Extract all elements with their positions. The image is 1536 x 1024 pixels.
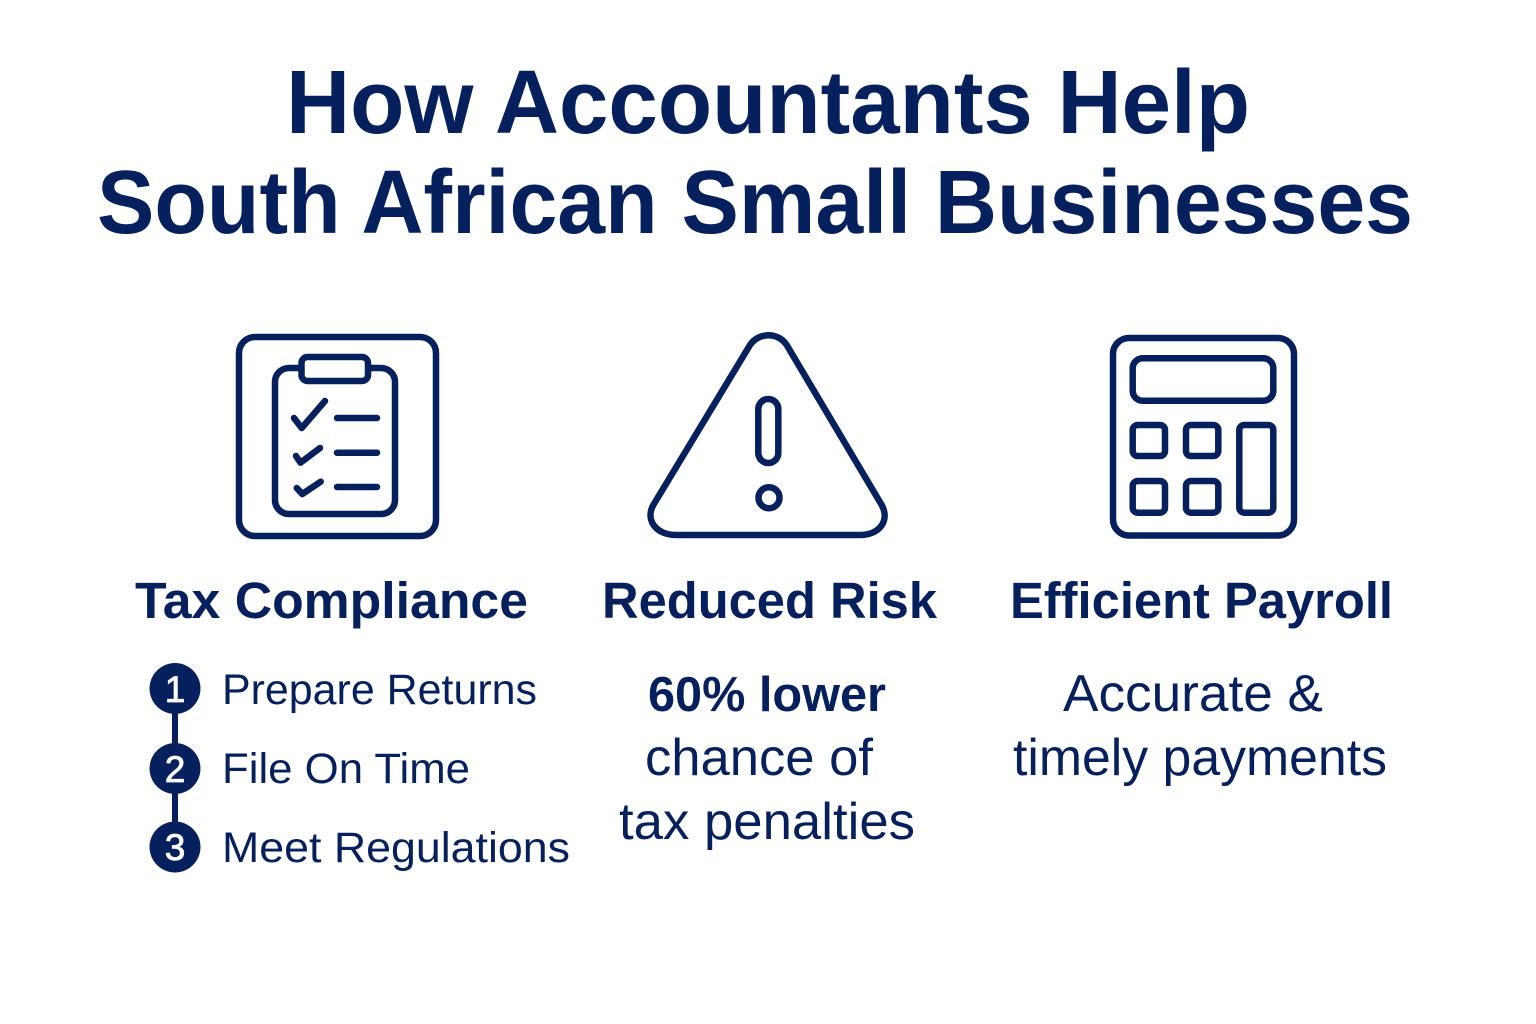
step 1: Prepare Returns — [222, 666, 537, 714]
panel: efficient payroll — [1010, 338, 1393, 787]
heading: reduced risk: Reduced Risk — [602, 572, 938, 629]
description text — [1013, 665, 1387, 787]
title: How Accountants Help — [286, 53, 1250, 153]
panel: reduced risk — [602, 335, 938, 851]
heading: efficient payroll: Efficient Payroll — [1010, 572, 1393, 629]
step 1: 1 — [165, 669, 185, 710]
icon: calculator — [1113, 338, 1294, 536]
statistic text: 60% lower — [648, 668, 886, 722]
description text: timely payments — [1013, 729, 1387, 787]
description text: Accurate & — [1063, 665, 1323, 723]
step 2: File On Time — [222, 745, 470, 793]
statistic text: tax penalties — [619, 793, 915, 851]
statistic text: chance of — [645, 729, 874, 787]
title: South African Small Businesses — [97, 153, 1413, 253]
icon: clipboard checklist — [239, 337, 436, 536]
title — [97, 53, 1413, 253]
statistic text — [619, 668, 915, 851]
panel: tax compliance — [135, 337, 570, 872]
step 2: 2 — [165, 749, 185, 790]
step 3: 3 — [165, 827, 185, 868]
heading: tax compliance: Tax Compliance — [135, 572, 528, 629]
icon: warning triangle — [651, 335, 885, 535]
step 3: Meet Regulations — [222, 824, 570, 872]
numbered steps — [150, 663, 570, 872]
